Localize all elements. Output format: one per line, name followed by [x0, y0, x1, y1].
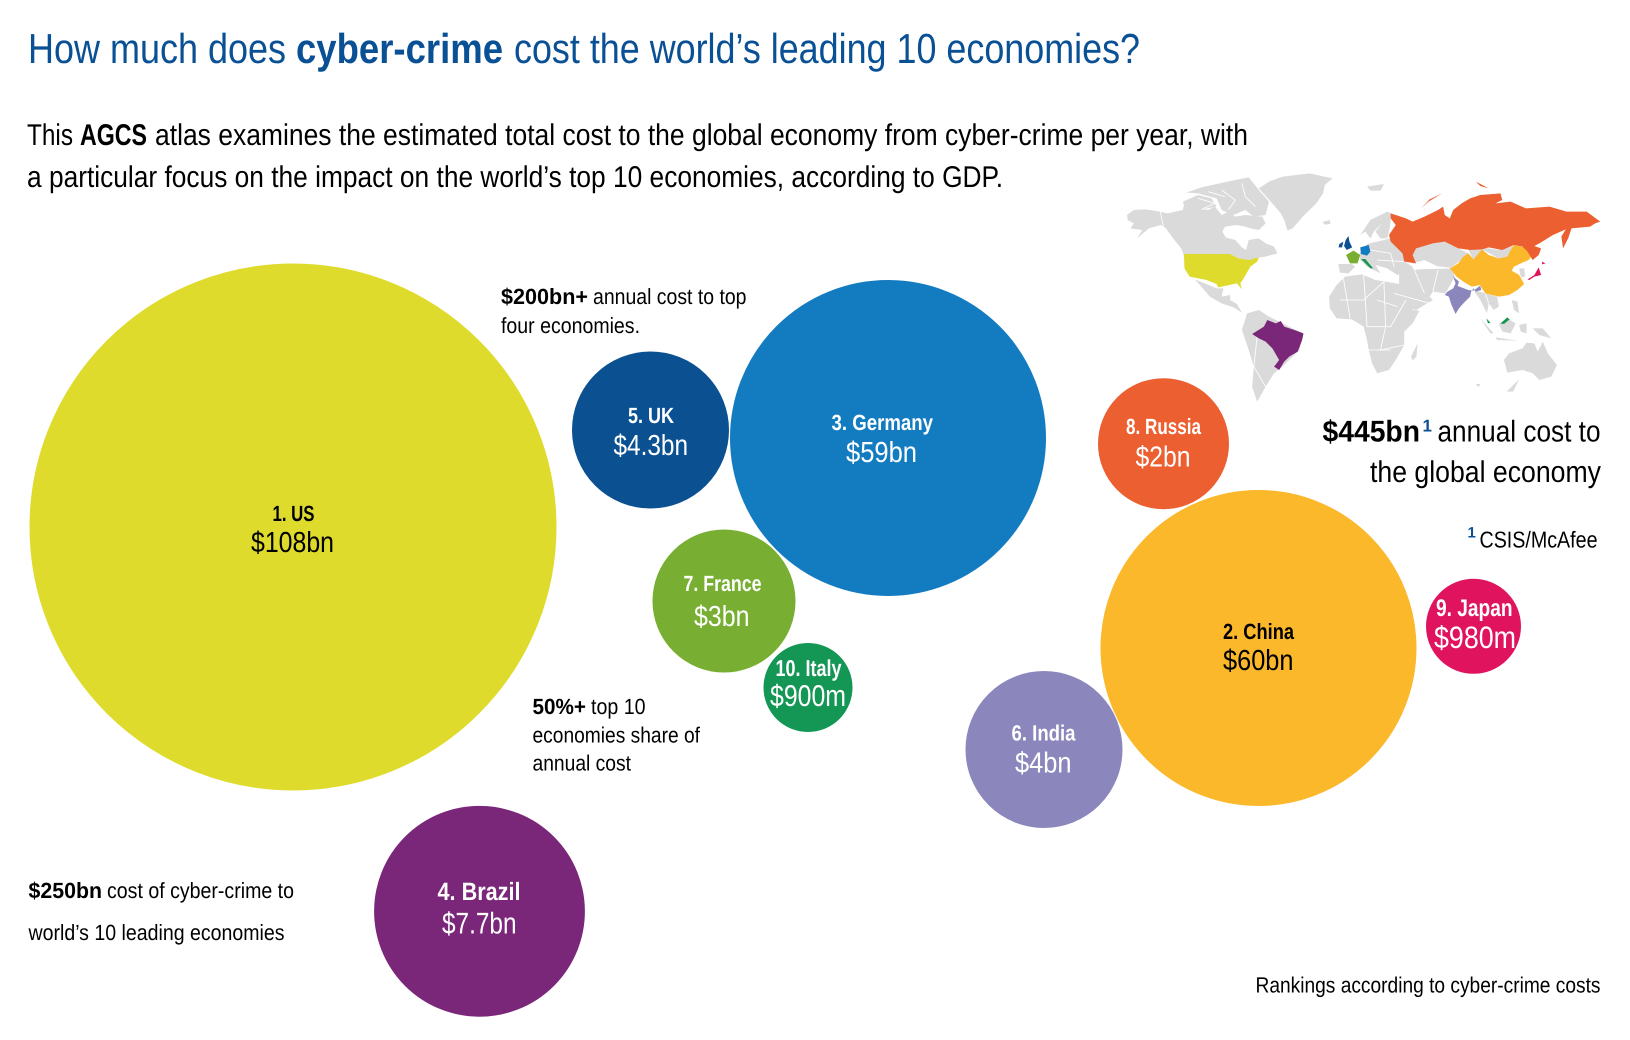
circle: Japan: 9. Japan	[1436, 595, 1512, 622]
circle: Brazil: $7.7bn	[442, 908, 516, 940]
circle: France	[652, 529, 796, 673]
intro text	[27, 119, 1248, 194]
map: India	[1445, 277, 1481, 314]
circle: China: 2. China	[1223, 619, 1295, 644]
callout: $445bn global cost: annual cost to	[1438, 416, 1600, 448]
circle: India: $4bn	[1015, 748, 1072, 780]
map: Russia	[1389, 182, 1600, 263]
callout: $445bn global cost: $445bn	[1322, 416, 1420, 448]
circle: Brazil	[374, 805, 585, 1017]
map: China	[1450, 245, 1533, 297]
circle: UK: $4.3bn	[614, 430, 688, 462]
title	[28, 25, 1140, 72]
callout: $250bn	[28, 878, 294, 945]
footnote: source: CSIS/McAfee	[1480, 526, 1598, 552]
callout: $445bn global cost: 1	[1422, 416, 1432, 436]
callout: $200bn+	[501, 284, 746, 338]
map borders	[1160, 183, 1489, 387]
title: cyber-crime	[296, 25, 503, 72]
circle: Russia	[1098, 378, 1230, 510]
intro text: atlas examines the estimated total cost to the global economy from cyber-crime per year, with	[155, 119, 1248, 152]
callout: $200bn+: $200bn+	[501, 284, 588, 309]
map: USA	[1184, 254, 1259, 289]
callout: 50%+: economies share of	[532, 722, 701, 748]
circle: Germany	[730, 280, 1046, 596]
callout: 50%+	[532, 694, 701, 776]
callout: 50%+: top 10	[591, 694, 646, 719]
circle: Russia: 8. Russia	[1126, 414, 1202, 439]
map: Italy	[1361, 259, 1510, 324]
circle: France: $3bn	[694, 601, 750, 633]
circle: India: 6. India	[1012, 720, 1076, 746]
map: France	[1346, 251, 1360, 263]
callout: $200bn+: annual cost to top	[593, 284, 746, 309]
circle: Germany: $59bn	[846, 437, 917, 469]
circle: Russia: $2bn	[1136, 442, 1190, 474]
circle: China	[1100, 490, 1417, 806]
footnote: source: 1	[1468, 524, 1476, 542]
title: cost the world’s leading 10 economies?	[514, 25, 1140, 72]
circle: Brazil: 4. Brazil	[438, 878, 520, 906]
callout: 50%+: annual cost	[532, 750, 631, 776]
intro text: This	[27, 119, 73, 152]
circle: Italy	[763, 642, 853, 732]
callout: $250bn: world’s 10 leading economies	[28, 920, 284, 945]
circle: US	[29, 263, 557, 791]
intro text: AGCS	[80, 119, 147, 152]
circle: France: 7. France	[684, 571, 762, 596]
callout: $445bn global cost	[1322, 416, 1601, 489]
title: How much does	[28, 25, 286, 72]
intro text: a particular focus on the impact on the world’s top 10 economies, according to GDP.	[27, 161, 1003, 194]
circle: Italy: 10. Italy	[776, 655, 842, 681]
circle: US: $108bn	[251, 527, 334, 559]
callout: $200bn+: four economies.	[501, 313, 640, 338]
map: Germany	[1360, 245, 1370, 256]
circle: Italy: $900m	[770, 680, 846, 713]
circle: UK	[572, 351, 730, 509]
map: Brazil	[1252, 320, 1303, 370]
circle: UK: 5. UK	[628, 403, 674, 428]
circle: US: 1. US	[272, 501, 314, 526]
circle: China: $60bn	[1223, 645, 1294, 677]
map: Japan	[1528, 262, 1545, 280]
world map	[1127, 173, 1600, 402]
circle: Japan	[1426, 578, 1522, 674]
map: UK	[1339, 236, 1352, 250]
callout: $445bn global cost: the global economy	[1370, 456, 1601, 489]
coloured countries	[1184, 182, 1600, 370]
circle: Germany: 3. Germany	[832, 410, 934, 435]
callout: 50%+: 50%+	[532, 694, 586, 719]
circle: India	[965, 670, 1123, 828]
callout: $250bn: cost of cyber-crime to	[107, 878, 294, 903]
circle: Japan: $980m	[1434, 620, 1516, 655]
callout: $250bn: $250bn	[28, 878, 102, 903]
